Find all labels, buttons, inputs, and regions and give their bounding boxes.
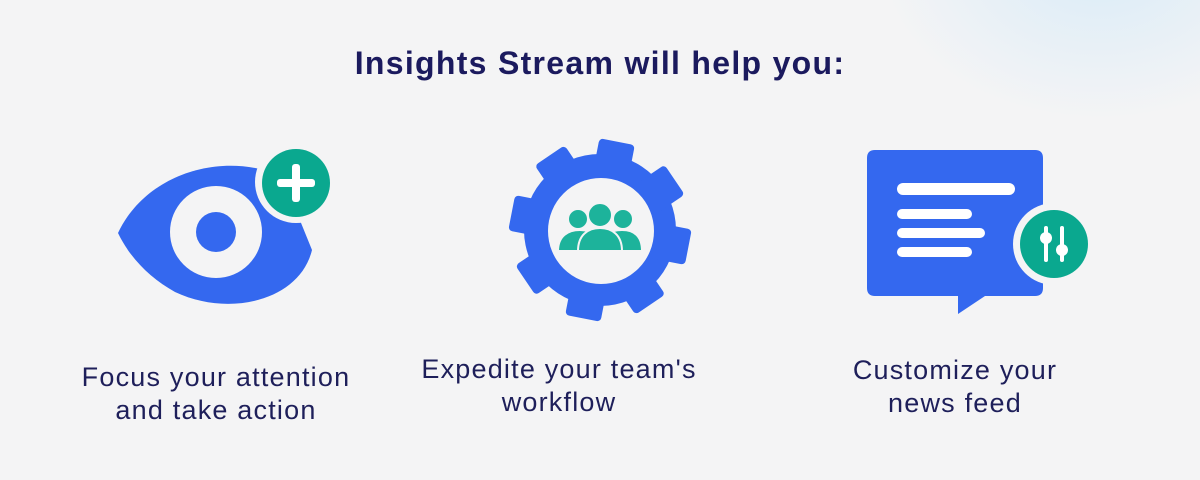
caption: focus: and take action	[115, 395, 317, 425]
caption: expedite	[421, 354, 697, 417]
caption: expedite: workflow	[502, 387, 616, 417]
caption: expedite: Expedite your team's	[421, 354, 697, 384]
caption: focus	[82, 362, 350, 425]
icon: eye with plus	[118, 141, 337, 304]
caption: focus: Focus your attention	[82, 362, 350, 392]
icon: news feed bubble with sliders	[867, 150, 1095, 314]
caption: customize: Customize your	[853, 355, 1057, 385]
caption: customize: news feed	[888, 388, 1022, 418]
caption: customize	[853, 355, 1057, 418]
icon: gear with team	[494, 124, 706, 336]
title: Insights Stream will help you:	[355, 45, 845, 81]
